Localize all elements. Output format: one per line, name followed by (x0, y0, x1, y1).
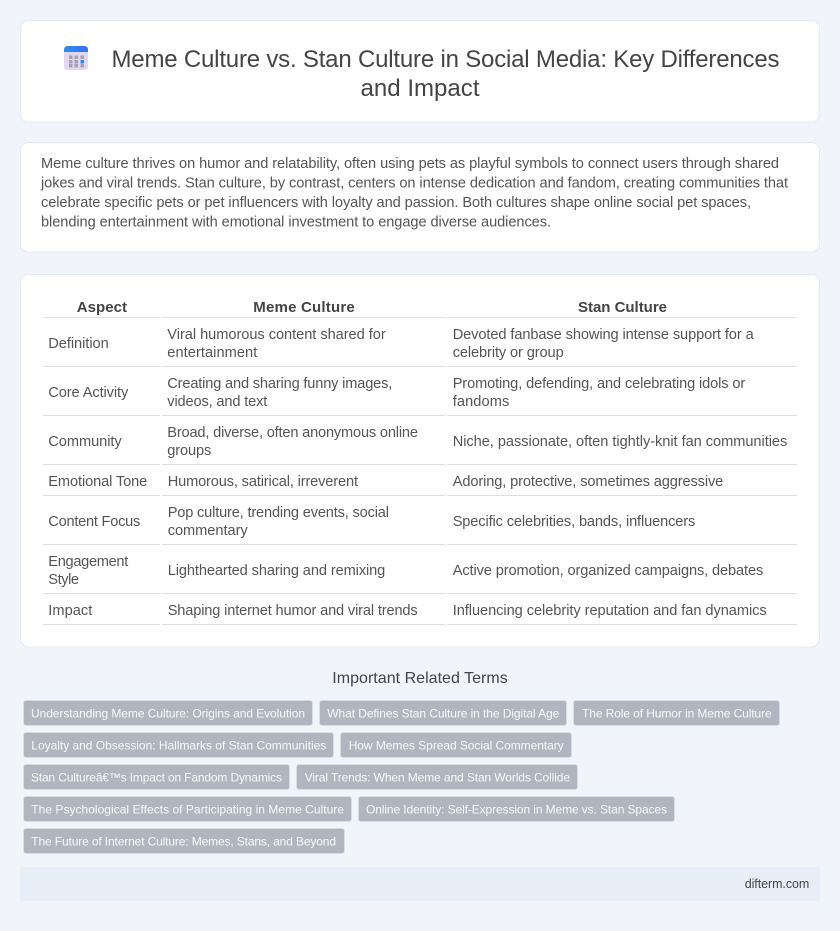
row: definition (43, 327, 797, 367)
tag: viral trends: Viral Trends: When Meme and Stan Worlds Collide (305, 770, 570, 784)
tag: online identity (358, 796, 674, 822)
row: community: groups (167, 443, 211, 459)
tag: understanding meme culture (24, 700, 312, 726)
row: emotional tone (43, 474, 797, 496)
row: definition: Viral humorous content shared for (167, 327, 386, 343)
table header row: Aspect (77, 299, 127, 316)
footer (20, 867, 820, 901)
tag: what defines stan culture (320, 700, 566, 726)
tag: loyalty and obsession (24, 732, 334, 758)
row: definition: celebrity or group (453, 345, 564, 361)
tag: online identity: Online Identity: Self-Expression in Meme vs. Stan Spaces (366, 802, 667, 816)
row: impact: Impact (48, 603, 92, 619)
table header row: Meme Culture (253, 299, 355, 316)
tag: role of humor (574, 700, 780, 726)
row: core activity: Creating and sharing funny images, (167, 376, 392, 392)
tag: stan culture impact (24, 764, 290, 790)
panel: comparison table (20, 274, 820, 647)
row: emotional tone: Humorous, satirical, irreverent (168, 474, 358, 490)
text block: description: blending entertainment with emotional investment to engage diverse audiences. (41, 214, 551, 230)
row: impact: Influencing celebrity reputation and fan dynamics (453, 603, 767, 619)
row: community: Broad, diverse, often anonymous online (167, 425, 418, 441)
row: community: Community (48, 434, 122, 450)
tag: future of internet culture (24, 828, 344, 854)
panel: description (20, 142, 820, 252)
panel: header (20, 20, 820, 122)
tag: role of humor: The Role of Humor in Meme Culture (582, 706, 772, 720)
tag: psychological effects (24, 796, 352, 822)
row: core activity: fandoms (453, 394, 509, 410)
row: engagement style: Active promotion, organized campaigns, debates (453, 563, 763, 579)
tag: understanding meme culture: Understanding Meme Culture: Origins and Evolution (31, 706, 305, 720)
tag: how memes spread: How Memes Spread Social Commentary (349, 738, 564, 752)
tag: stan culture impact: Stan Cultureâ€™s Impact on Fandom Dynamics (31, 770, 282, 784)
row: engagement style: Style (48, 572, 79, 588)
row: content focus: Pop culture, trending events, social (168, 505, 389, 521)
row: impact (43, 603, 797, 625)
title (112, 46, 780, 102)
row: content focus: Content Focus (48, 514, 140, 530)
row: core activity: Promoting, defending, and celebrating idols or (453, 376, 745, 392)
row: emotional tone: Adoring, protective, sometimes aggressive (453, 474, 723, 490)
text block: description: celebrate specific pets or pet influencers with loyalty and passion. Both cultures shape online social pet spaces, (41, 195, 751, 211)
row: engagement style (43, 554, 797, 594)
icon: calendar (64, 46, 88, 70)
row: impact: Shaping internet humor and viral trends (168, 603, 418, 619)
panel: related term tags (24, 700, 780, 854)
row: community: Niche, passionate, often tightly-knit fan communities (453, 434, 787, 450)
title: Meme Culture vs. Stan Culture in Social Media: Key Differences (112, 46, 780, 73)
row: core activity: Core Activity (48, 385, 129, 401)
row: content focus: Specific celebrities, bands, influencers (453, 514, 695, 530)
tag: how memes spread (340, 732, 572, 758)
heading: important related terms: Important Related Terms (332, 670, 508, 687)
row: engagement style: Engagement (48, 554, 128, 570)
row: emotional tone: Emotional Tone (48, 474, 147, 490)
tag: viral trends (296, 764, 578, 790)
tag: loyalty and obsession: Loyalty and Obsession: Hallmarks of Stan Communities (31, 738, 326, 752)
text block: description: jokes and viral trends. Stan culture, by contrast, centers on intense dedication and fandom, creating communities that (40, 176, 788, 192)
row: engagement style: Lighthearted sharing and remixing (168, 563, 385, 579)
title: and Impact (360, 75, 480, 102)
tag: future of internet culture: The Future of Internet Culture: Memes, Stans, and Beyond (31, 834, 336, 848)
row: core activity: videos, and text (167, 394, 267, 410)
row: definition: Definition (48, 336, 109, 352)
row: community (43, 425, 797, 465)
row: definition: entertainment (167, 345, 257, 361)
table header row: Stan Culture (578, 299, 667, 316)
tag: psychological effects: The Psychological Effects of Participating in Meme Culture (31, 802, 344, 816)
row: definition: Devoted fanbase showing intense support for a (453, 327, 755, 343)
row: core activity (43, 376, 797, 416)
table header row (43, 299, 797, 318)
text block: description (40, 156, 788, 230)
row: content focus: commentary (168, 523, 248, 539)
tag: what defines stan culture: What Defines Stan Culture in the Digital Age (327, 706, 560, 720)
text block: description: Meme culture thrives on humor and relatability, often using pets as playful symbols to connect users through shared (41, 156, 779, 172)
footer: difterm.com (745, 877, 809, 891)
row: content focus (43, 505, 797, 545)
